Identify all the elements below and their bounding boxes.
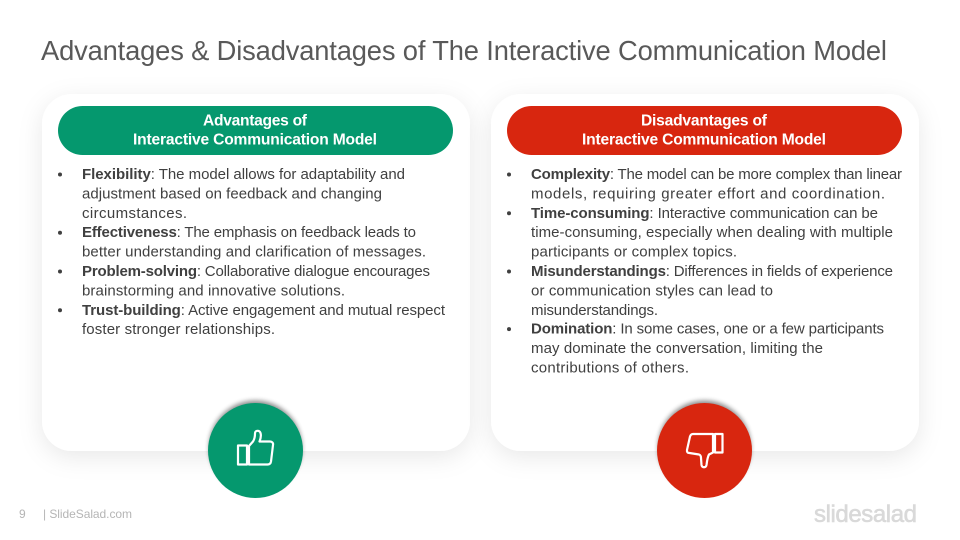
text block: advantages list: circumstances. [82, 205, 187, 222]
text block: disadvantages list: or communication styles can lead to [531, 282, 773, 299]
text block: disadvantages list: models, requiring greater effort and coordination. [531, 185, 885, 202]
icon: thumbs down badge [657, 400, 752, 498]
panel background: advantages [42, 94, 470, 451]
text block: advantages list: brainstorming and innovative solutions. [82, 282, 345, 299]
text block: disadvantages list: may dominate the conversation, limiting the [531, 340, 823, 357]
heading: advantages: Advantages of [203, 112, 308, 130]
text block: advantages list: Trust-building: Active engagement and mutual respect [82, 302, 446, 319]
text block: advantages list: Problem-solving: Collaborative dialogue encourages [82, 263, 430, 280]
page number: 9 [19, 507, 26, 521]
heading: disadvantages: Interactive Communication Model [582, 132, 826, 148]
footer text: | SlideSalad.com [43, 507, 132, 521]
logo: slidesalad wordmark: slidesalad [814, 501, 917, 528]
heading: disadvantages: Disadvantages of [641, 112, 768, 130]
panel background: disadvantages [491, 94, 919, 451]
text block: advantages list: Effectiveness: The emphasis on feedback leads to [82, 224, 416, 241]
icon: thumbs up badge [208, 400, 303, 498]
text block: advantages list: foster stronger relationships. [82, 321, 275, 338]
title: Advantages & Disadvantages of The Interactive Communication Model [41, 35, 887, 66]
heading: disadvantages [507, 106, 902, 155]
panel: advantages [42, 94, 470, 451]
text block: disadvantages list: participants or complex topics. [531, 244, 737, 261]
text block: disadvantages list: time-consuming, especially when dealing with multiple [531, 224, 893, 241]
text block: disadvantages list: Domination: In some cases, one or a few participants [531, 321, 884, 338]
text block: disadvantages list: contributions of others. [531, 359, 689, 376]
text block: advantages list [58, 166, 446, 338]
text block: advantages list: Flexibility: The model allows for adaptability and [82, 166, 405, 183]
text block: disadvantages list: Misunderstandings: Differences in fields of experience [531, 263, 893, 280]
text block: advantages list: adjustment based on feedback and changing [82, 185, 382, 202]
text block: disadvantages list: misunderstandings. [531, 302, 658, 319]
panel: disadvantages [491, 94, 919, 451]
text block: disadvantages list [507, 166, 902, 376]
text block: disadvantages list: Complexity: The model can be more complex than linear [531, 166, 902, 183]
heading: advantages: Interactive Communication Model [133, 132, 377, 148]
heading: advantages [58, 106, 453, 155]
text block: disadvantages list: Time-consuming: Interactive communication can be [531, 205, 878, 222]
text block: advantages list: better understanding and clarification of messages. [82, 244, 426, 261]
